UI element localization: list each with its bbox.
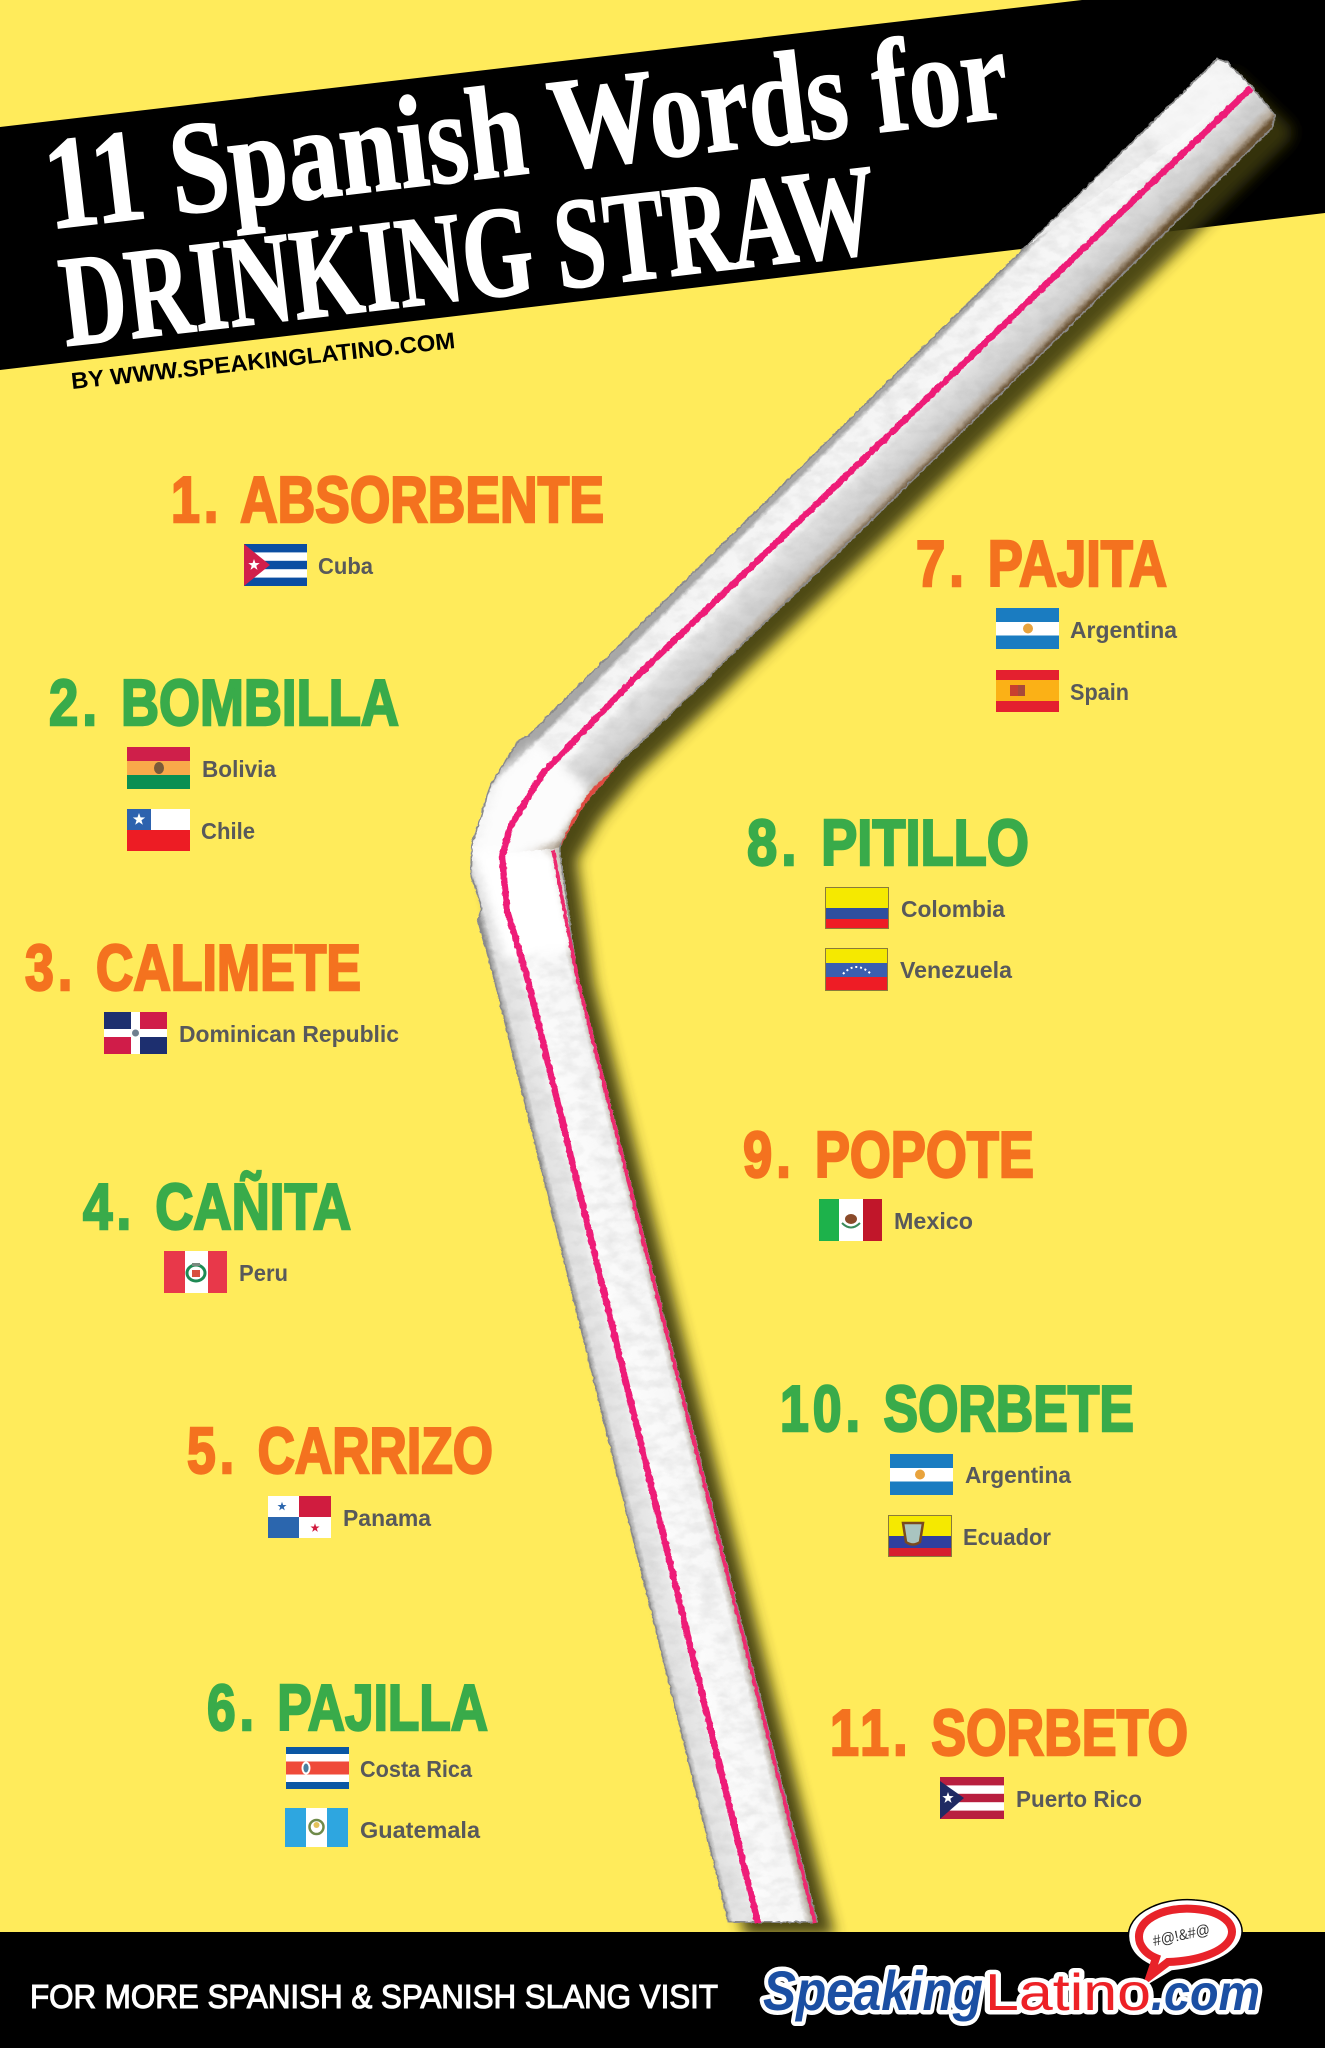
panel: 7 pajita xyxy=(916,527,1177,712)
footer call to action: FOR MORE SPANISH & SPANISH SLANG VISIT xyxy=(30,1978,718,2015)
panel: 4 canita xyxy=(83,1170,351,1293)
flag: Puerto Rico xyxy=(940,1777,1004,1819)
heading: 2. BOMBILLA xyxy=(49,666,399,739)
label: Panama xyxy=(343,1505,431,1531)
flag: Panama xyxy=(268,1496,331,1538)
label: Spain xyxy=(1070,679,1129,705)
flag: Argentina xyxy=(996,608,1059,649)
title line 2: DRINKING STRAW xyxy=(53,138,884,375)
label: Colombia xyxy=(901,896,1005,922)
panel: 3 calimete xyxy=(25,931,399,1054)
flag: Mexico xyxy=(819,1199,882,1241)
panel: 10 sorbete xyxy=(780,1372,1134,1557)
title band xyxy=(0,0,1325,370)
flag: Chile xyxy=(127,809,190,851)
flag: Dominican Republic xyxy=(104,1012,167,1054)
label: Mexico xyxy=(894,1208,973,1234)
logo word: Latino: Latino xyxy=(985,1964,1151,2022)
flag: Venezuela xyxy=(825,948,888,991)
flag: Ecuador xyxy=(888,1515,952,1557)
heading: 6. PAJILLA xyxy=(207,1671,488,1744)
byline: BY WWW.SPEAKINGLATINO.COM xyxy=(70,327,456,394)
logo: SpeakingLatino.com xyxy=(763,1900,1260,2022)
panel: 9 popote xyxy=(743,1118,1034,1241)
label: Bolivia xyxy=(202,756,276,782)
label: Chile xyxy=(201,818,255,844)
logo word: .com: .com xyxy=(1151,1965,1260,2021)
flag: Peru xyxy=(164,1251,227,1293)
panel: 1 absorbente xyxy=(171,463,604,586)
pink stripe: edge xyxy=(553,850,815,1923)
label: Puerto Rico xyxy=(1016,1786,1142,1812)
title xyxy=(36,0,1015,375)
heading: 5. CARRIZO xyxy=(187,1414,493,1487)
panel: 5 carrizo xyxy=(187,1414,493,1538)
label: Peru xyxy=(239,1260,288,1286)
label: Costa Rica xyxy=(360,1756,472,1782)
straw illustration xyxy=(470,58,1276,1924)
flag: Bolivia xyxy=(127,747,190,789)
heading: 10. SORBETE xyxy=(780,1372,1134,1445)
label: Guatemala xyxy=(360,1817,480,1843)
heading: 1. ABSORBENTE xyxy=(171,463,604,536)
label: Venezuela xyxy=(900,957,1012,983)
panel: 6 pajilla xyxy=(207,1671,488,1847)
logo word: Speaking: Speaking xyxy=(763,1959,983,2022)
label: Dominican Republic xyxy=(179,1021,399,1047)
label: Argentina xyxy=(1070,617,1177,643)
straw drop shadow xyxy=(487,71,1293,1936)
footer band xyxy=(0,1932,1325,2048)
heading: 8. PITILLO xyxy=(747,806,1029,879)
label: Cuba xyxy=(318,553,373,579)
flag: Argentina xyxy=(890,1454,953,1495)
heading: 4. CAÑITA xyxy=(83,1170,351,1243)
label: Ecuador xyxy=(963,1524,1051,1550)
icon: speech bubble xyxy=(1128,1900,1242,1988)
heading: 9. POPOTE xyxy=(743,1118,1034,1191)
speech bubble text: #@!&#@ xyxy=(1151,1921,1212,1950)
flag: Guatemala xyxy=(285,1808,348,1847)
heading: 7. PAJITA xyxy=(916,527,1167,600)
panel: 2 bombilla xyxy=(49,666,399,851)
flag: Colombia xyxy=(825,887,889,929)
flag: Spain xyxy=(996,670,1059,712)
flag: Cuba xyxy=(244,544,307,586)
heading: 3. CALIMETE xyxy=(25,931,361,1004)
heading: 11. SORBETO xyxy=(830,1696,1188,1769)
panel: 8 pitillo xyxy=(747,806,1029,991)
pink stripe: main xyxy=(502,88,1251,1923)
label: Argentina xyxy=(965,1462,1071,1488)
flag: Costa Rica xyxy=(286,1747,349,1789)
panel: 11 sorbeto xyxy=(830,1696,1188,1819)
